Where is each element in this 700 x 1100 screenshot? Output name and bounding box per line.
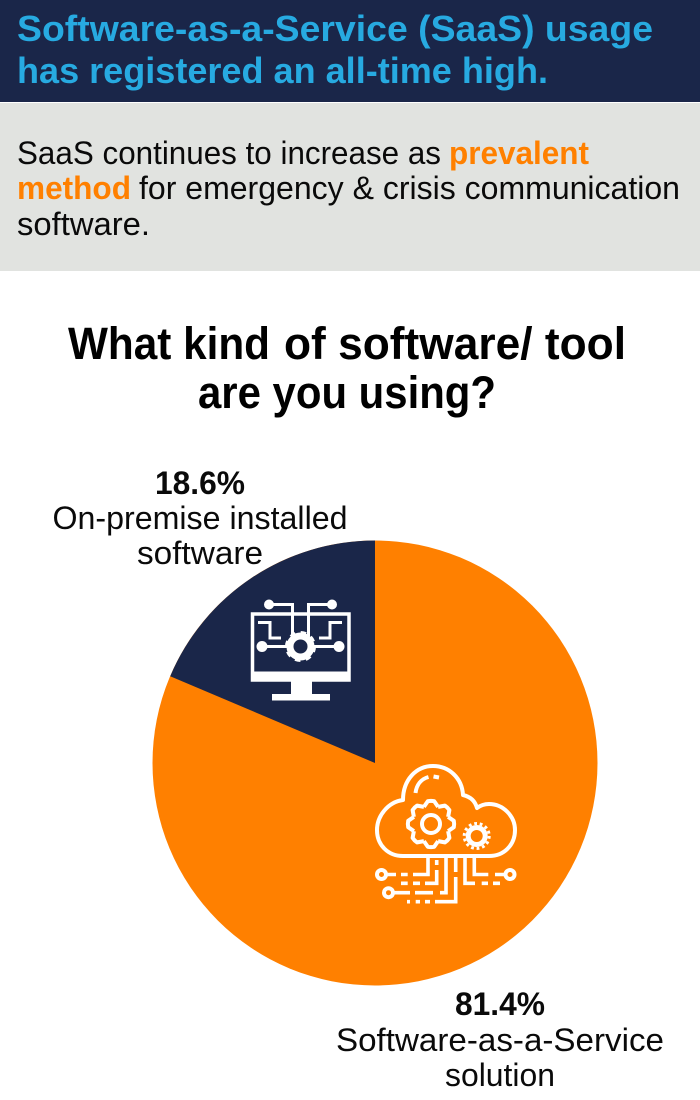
- intro text: prevalent: [449, 135, 589, 171]
- intro text: SaaS continues to increase as: [17, 135, 441, 171]
- label: SaaS: [336, 986, 664, 1093]
- icon: monitor with circuit gear: [251, 600, 350, 700]
- intro text: for emergency & crisis communication: [139, 170, 680, 206]
- label: on-premise: On-premise installed: [52, 500, 348, 536]
- chart title: are you using?: [198, 367, 496, 418]
- slice: on-premise 18.6%: [170, 540, 375, 763]
- header banner: [0, 0, 700, 102]
- label: on-premise: 18.6%: [155, 465, 245, 501]
- intro text: method: [17, 170, 131, 206]
- label: SaaS: 81.4%: [455, 986, 545, 1022]
- intro text: software.: [17, 206, 150, 242]
- chart title: of software/ tool: [284, 318, 626, 369]
- intro text: [17, 135, 680, 242]
- pie chart: [152, 540, 598, 986]
- chart title: What kind: [68, 318, 270, 369]
- label: on-premise: [52, 465, 348, 571]
- header title: has registered an all-time high.: [17, 50, 548, 91]
- label: on-premise: software: [137, 535, 263, 571]
- label: SaaS: Software-as-a-Service: [336, 1022, 664, 1058]
- icon: cloud with gears and circuits: [377, 766, 515, 902]
- intro panel: [0, 103, 700, 271]
- label: SaaS: solution: [445, 1057, 555, 1093]
- chart title: [68, 318, 626, 418]
- header title: Software-as-a-Service (SaaS) usage: [17, 8, 653, 49]
- header title: [17, 8, 653, 91]
- slice: SaaS 81.4%: [152, 540, 598, 986]
